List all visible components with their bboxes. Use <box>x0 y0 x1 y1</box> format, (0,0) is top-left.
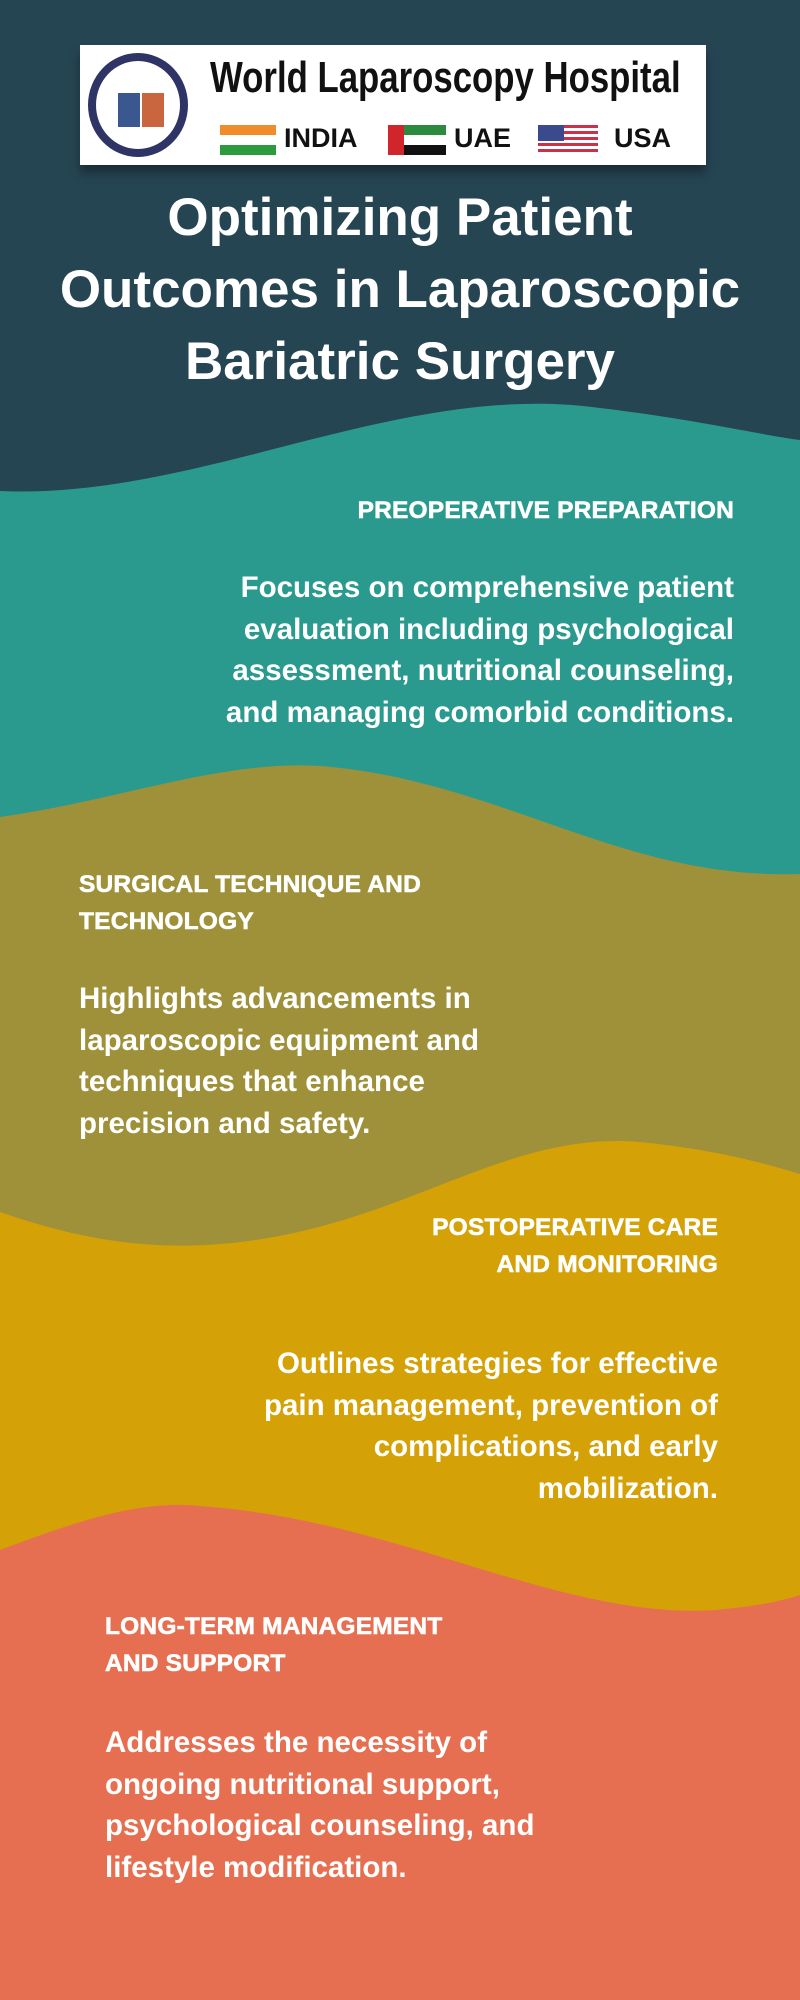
icon: wreath emblem <box>88 53 188 157</box>
heading: AND SUPPORT <box>105 1650 286 1677</box>
body text: evaluation including psychological <box>244 612 734 646</box>
flags row: UAE <box>454 123 511 153</box>
heading <box>78 871 421 935</box>
title: Outcomes in Laparoscopic <box>60 260 740 319</box>
body text: mobilization. <box>538 1472 718 1504</box>
panel: postoperative care <box>264 1214 718 1504</box>
body text <box>79 982 479 1140</box>
body text <box>105 1726 534 1884</box>
body text: Focuses on comprehensive patient <box>241 571 734 604</box>
panel: surgical technique <box>78 871 479 1140</box>
title <box>60 188 740 391</box>
body text: psychological counseling, and <box>105 1809 534 1842</box>
body text: laparoscopic equipment and <box>79 1024 479 1056</box>
panel: preoperative preparation <box>226 497 734 728</box>
flags row: USA <box>614 123 671 153</box>
body text: pain management, prevention of <box>264 1388 718 1422</box>
body text: complications, and early <box>374 1430 718 1463</box>
body text: precision and safety. <box>79 1106 370 1140</box>
heading: TECHNOLOGY <box>79 908 254 935</box>
body text: Outlines strategies for effective <box>277 1347 718 1380</box>
heading <box>105 1613 442 1677</box>
body text: assessment, nutritional counseling, <box>232 654 734 687</box>
body text <box>264 1347 718 1504</box>
body text: Addresses the necessity of <box>105 1726 487 1759</box>
logo banner <box>80 45 706 165</box>
title: Bariatric Surgery <box>185 332 615 391</box>
heading: LONG-TERM MANAGEMENT <box>105 1613 442 1640</box>
logo text: World Laparoscopy Hospital <box>210 53 681 102</box>
heading <box>432 1214 718 1278</box>
panel: long-term management <box>105 1613 534 1884</box>
heading: SURGICAL TECHNIQUE AND <box>79 871 421 898</box>
body text: techniques that enhance <box>79 1065 425 1098</box>
heading: PREOPERATIVE PREPARATION <box>358 497 734 524</box>
heading: AND MONITORING <box>497 1251 718 1278</box>
flags row <box>220 123 671 155</box>
body text: Highlights advancements in <box>79 982 471 1015</box>
body text: and managing comorbid conditions. <box>226 696 734 728</box>
body text: ongoing nutritional support, <box>105 1768 500 1800</box>
body text <box>226 571 734 728</box>
title: Optimizing Patient <box>167 188 633 247</box>
heading: POSTOPERATIVE CARE <box>432 1214 718 1241</box>
body text: lifestyle modification. <box>105 1850 407 1884</box>
flags row: INDIA <box>284 123 358 153</box>
